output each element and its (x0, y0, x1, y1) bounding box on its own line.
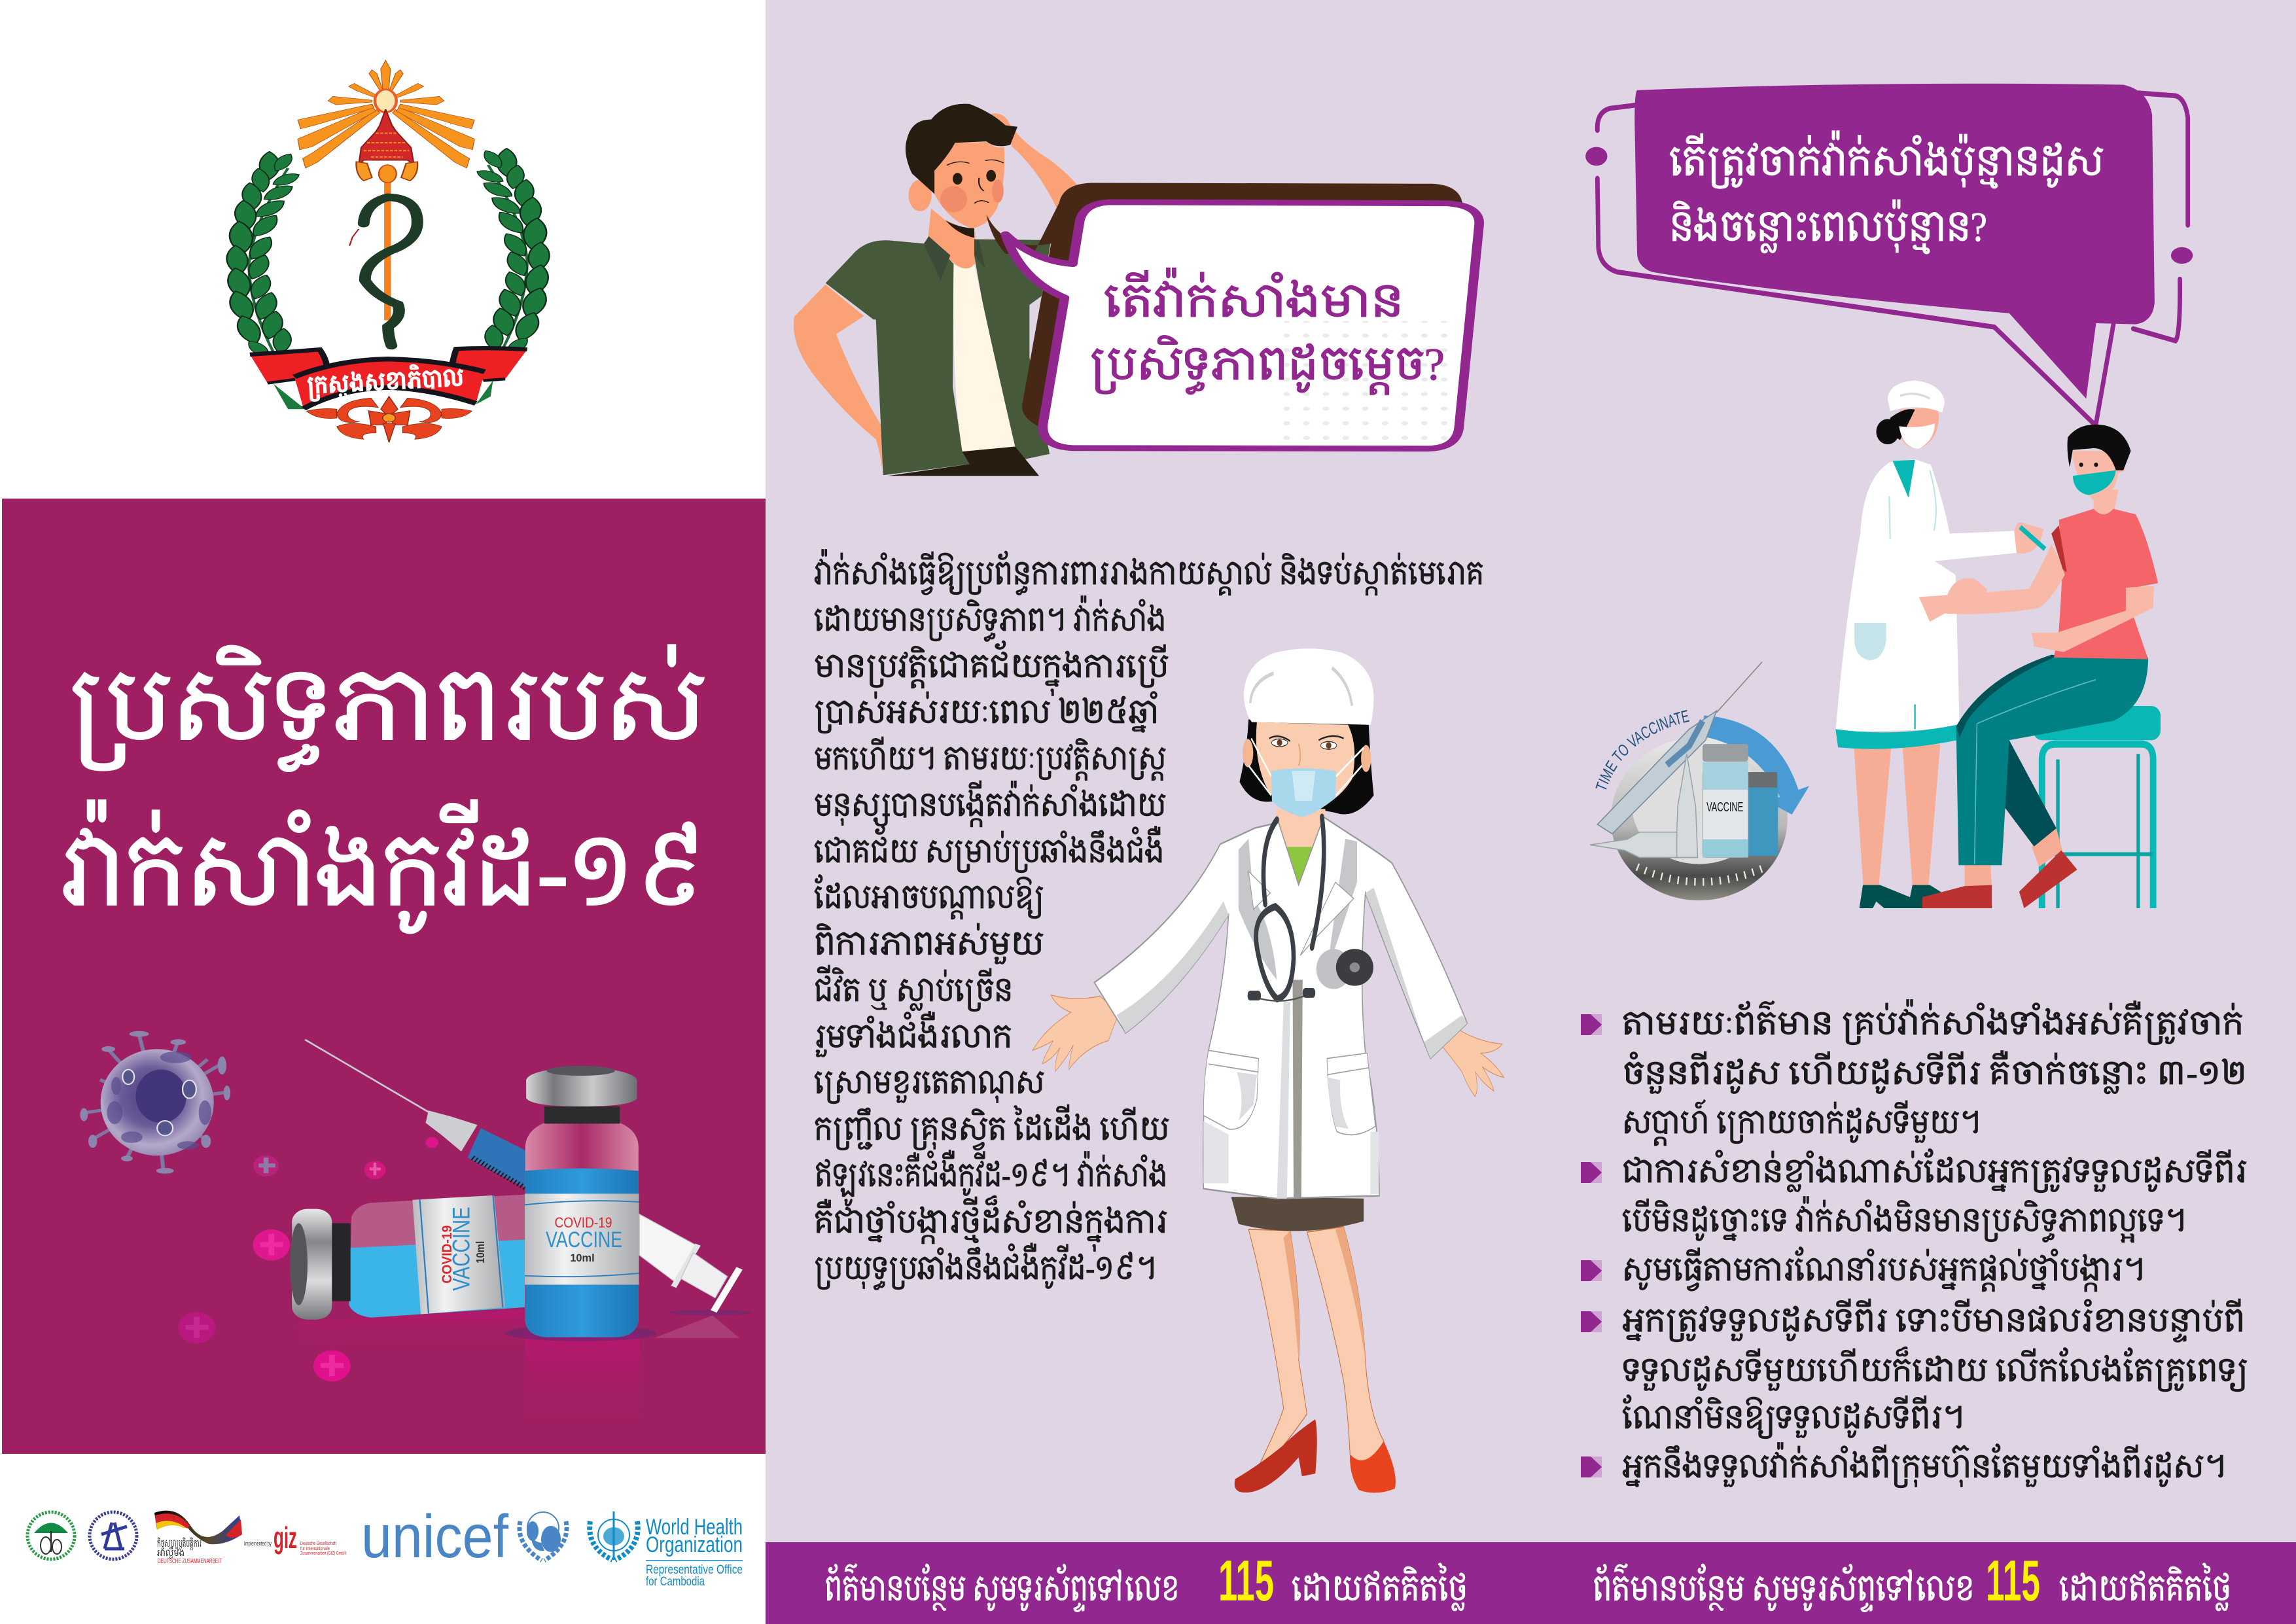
ornament (306, 397, 472, 442)
bullet 3 (1581, 1260, 1602, 1281)
icon: time to vaccinate clock: TIME TO VACCINATE (1595, 710, 1689, 789)
ribbon tails (250, 348, 527, 383)
info list: សូមធ្វើតាមការណែនាំរបស់អ្នកផ្តល់ថ្នាំបង្ការ។ (1622, 1246, 2146, 1292)
bullet 4 (1581, 1311, 1602, 1332)
hands (1033, 995, 1119, 1071)
logo: German Cambodian cooperation: កិច្ចសហប្រតិបត្តិការ (157, 1538, 202, 1550)
lying vial: VACCINE (449, 1207, 475, 1291)
neck (928, 209, 975, 268)
bubble question text (1669, 130, 2104, 254)
bubble fill (1634, 84, 2155, 398)
outline dots (1585, 147, 1607, 166)
info list (1581, 999, 2248, 1488)
body paragraph: វ៉ាក់សាំងធ្វើឱ្យប្រព័ន្ធការពាររាងកាយស្គាល់ និងទប់ស្កាត់មេរោគ (814, 549, 1484, 595)
virus (80, 1031, 230, 1174)
bullet 5 (1581, 1456, 1602, 1477)
unicef emblem (520, 1512, 567, 1561)
speech bubble: how many doses (1585, 84, 2193, 423)
raised arm (989, 113, 1078, 211)
crown (356, 109, 417, 181)
patient (1919, 425, 2158, 908)
body paragraph: ពិការភាពអស់មួយ (814, 923, 1044, 964)
footer bar: ដោយឥតគិតថ្លៃ (1292, 1563, 1468, 1612)
snake (364, 197, 417, 345)
logo: German Cambodian cooperation: អាល្លឺម៉ង់ (157, 1546, 185, 1559)
trousers (888, 447, 1039, 476)
standing vial (525, 1066, 639, 1337)
logo: partner round seal blue (90, 1512, 137, 1559)
lying vial (290, 1195, 525, 1320)
WHO emblem (590, 1511, 638, 1560)
logo: giz: Deutsche Gesellschaft (300, 1542, 336, 1546)
illustration: virus and vaccines (80, 1031, 752, 1432)
nurse (1835, 381, 2045, 908)
skirt (1231, 1197, 1364, 1231)
info list: ទទួលដូសទីមួយហើយក៏ដោយ លើកលែងតែគ្រូពេទ្យ (1622, 1347, 2248, 1392)
logo: World Health Organization: Representative Office (646, 1563, 743, 1577)
footer bar (766, 1542, 2296, 1624)
character: confused man with speech bubble (794, 104, 1479, 476)
hair (1239, 720, 1373, 815)
body paragraph: កញ្ជ្រឹល គ្រុនស្វិត ដៃដើង ហើយ (814, 1104, 1169, 1151)
info list: តាមរយៈព័ត៌មាន គ្រប់វ៉ាក់សាំងទាំងអស់គឺត្រូវចាក់ (1622, 999, 2244, 1045)
info list: សប្តាហ៍ ក្រោយចាក់ដូសទីមួយ។ (1622, 1100, 1981, 1146)
logo: giz (244, 1521, 346, 1556)
illustration: nurse vaccinating patient (1835, 381, 2161, 908)
logo: unicef: unicef (361, 1502, 508, 1570)
ears (1243, 739, 1253, 767)
ear (909, 180, 932, 211)
neck and chest (1275, 809, 1326, 885)
coat shading (1117, 888, 1467, 1059)
curved caption (1605, 721, 1691, 792)
mask (1248, 739, 1364, 796)
logo: giz: giz (274, 1521, 297, 1555)
bubble question: ប្រសិទ្ធភាពដូចម្តេច? (1089, 336, 1445, 395)
body paragraph: ដោយមានប្រសិទ្ធភាព។ វ៉ាក់សាំង (814, 595, 1166, 642)
bubble (1006, 202, 1479, 449)
left wreath (224, 152, 302, 359)
legs (1248, 1229, 1307, 1466)
bubble question text: តើត្រូវចាក់វ៉ាក់សាំងប៉ុន្មានដូស (1669, 130, 2104, 189)
standing vial: COVID-19 (554, 1215, 612, 1231)
left arm (794, 285, 899, 467)
cap (1244, 648, 1373, 725)
body paragraph: ឥឡូវនេះគឺជំងឺកូវីដ-១៩។ វ៉ាក់សាំង (814, 1150, 1167, 1207)
icon: time to vaccinate clock (1590, 662, 1809, 900)
ribbon band (294, 359, 485, 408)
body paragraph: ប្រាស់អស់រយៈពេល ២២៥ឆ្នាំ (814, 692, 1159, 733)
bubble question text: និងចន្លោះពេលប៉ុន្មាន? (1669, 199, 1987, 254)
info list: អ្នកត្រូវទទួលដូសទីពីរ ទោះបីមានផលរំខានបន្ទាប់ពី (1622, 1299, 2245, 1343)
face (934, 142, 1004, 228)
footer bar: ដោយឥតគិតថ្លៃ (2059, 1563, 2231, 1612)
hotline number left: 115 (1218, 1548, 1274, 1613)
logo: World Health Organization (590, 1511, 743, 1589)
logo: giz: Implemented by (244, 1540, 272, 1547)
coat (1094, 817, 1467, 1199)
info list: ណែនាំមិនឱ្យទទួលដូសទីពីរ។ (1622, 1394, 1965, 1439)
clock dial (1611, 737, 1788, 900)
panel: magenta title block (2, 499, 766, 1454)
vaccine bottle (1703, 771, 1748, 858)
logo: partner round seal green (27, 1512, 75, 1559)
title line 1: ប្រសិទ្ធភាពរបស់ (68, 645, 705, 771)
reflection (525, 1334, 639, 1432)
body paragraph: ប្រយុទ្ធប្រឆាំងនឹងជំងឺកូវីដ-១៩។ (814, 1243, 1157, 1290)
undershirt (953, 264, 1015, 451)
info list: ជាការសំខាន់ខ្លាំងណាស់ដែលអ្នកត្រូវទទួលដូសទីពីរ (1622, 1148, 2247, 1193)
standing vial: 10ml (570, 1252, 595, 1263)
panel: right lilac background (766, 0, 2296, 1624)
emblem: Ministry of Health (224, 60, 552, 442)
hotline number right: 115 (1986, 1548, 2040, 1613)
logo: giz: Zusammenarbeit (GIZ) GmbH (300, 1551, 346, 1556)
body paragraph: មានប្រវត្តិជោគជ័យក្នុងការប្រើ (814, 641, 1169, 696)
plus dots (178, 1137, 438, 1381)
syringe (1716, 662, 1762, 713)
bubble question (1089, 268, 1445, 395)
body paragraph: ស្រោមខួរតេតាណុស (814, 1064, 1044, 1104)
collar (924, 236, 985, 280)
title line 2: វ៉ាក់សាំងកូវីដ-១៩ (62, 800, 707, 933)
face (1256, 722, 1354, 813)
logo: German Cambodian cooperation (154, 1511, 242, 1565)
logo: World Health Organization: Organization (646, 1532, 743, 1557)
shoes (1235, 1419, 1317, 1492)
shirt (826, 236, 970, 475)
bullet 2 (1581, 1162, 1602, 1183)
lower leaves behind ribbon (274, 381, 493, 409)
title (62, 645, 707, 933)
character: female doctor (1033, 648, 1504, 1493)
right wreath (474, 149, 552, 356)
info list: បើមិនដូច្នោះទេ វ៉ាក់សាំងមិនមានប្រសិទ្ធភាពល្អទេ។ (1622, 1196, 2187, 1243)
body paragraph: ដែលអាចបណ្តាលឱ្យ (814, 874, 1044, 919)
ampoule (1676, 754, 1698, 858)
facial features (953, 173, 963, 185)
body paragraph (814, 549, 1484, 1290)
stethoscope (1256, 817, 1324, 999)
body paragraph: រួមទាំងជំងឺរលាក (814, 1011, 1012, 1057)
icon: time to vaccinate clock: VACCINE (1706, 800, 1743, 815)
halftone (1281, 321, 1457, 445)
arrow (1702, 715, 1809, 815)
info list: ចំនួនពីរដូស ហើយដូសទីពីរ គឺចាក់ចន្លោះ ៣-១២ (1622, 1050, 2247, 1094)
footer left text: ព័ត៌មានបន្ថែម សូមទូរស័ព្ទទៅលេខ (824, 1564, 1179, 1612)
bubble shadow (986, 183, 1462, 432)
stool (2033, 706, 2161, 908)
body paragraph: មនុស្សបានបង្កើតវ៉ាក់សាំងដោយ (814, 781, 1166, 827)
body paragraph: មកហើយ។ តាមរយៈប្រវត្តិសាស្ត្រ (814, 737, 1166, 781)
syringe (305, 1040, 739, 1311)
hair (906, 104, 1017, 194)
logo: giz: für Internationale (300, 1547, 330, 1551)
standing vial: VACCINE (546, 1227, 622, 1252)
bubble outline (1597, 93, 2188, 423)
bubble question: តើវ៉ាក់សាំងមាន (1104, 268, 1404, 327)
body paragraph: គឺជាថ្នាំបង្ការថ្មីដ៏សំខាន់ក្នុងការ (814, 1195, 1167, 1251)
logo: World Health Organization: World Health (646, 1515, 743, 1540)
staff (384, 175, 391, 321)
ribbon lettering: ក្រសួងសុខាភិបាល (306, 361, 465, 402)
info list: អ្នកនឹងទទួលវ៉ាក់សាំងពីក្រុមហ៊ុនតែមួយទាំងពីរដូស។ (1622, 1442, 2227, 1488)
bullet 1 (1581, 1014, 1602, 1035)
lying vial: 10ml (474, 1241, 487, 1263)
flame (375, 90, 397, 113)
lying vial: COVID-19 (440, 1226, 455, 1284)
logo: German Cambodian cooperation: DEUTSCHE ZUSAMMENARBEIT (158, 1558, 222, 1565)
blue bottle (1747, 773, 1778, 856)
sun rays (298, 60, 474, 168)
logo: World Health Organization: for Cambodia (646, 1575, 705, 1589)
pockets (1203, 1050, 1258, 1129)
body paragraph: ជោគជ័យ សម្រាប់ប្រឆាំងនឹងជំងឺ (814, 826, 1164, 873)
body paragraph: ជីវិត ឬ ស្លាប់ច្រើន (814, 965, 1013, 1012)
footer right text: ព័ត៌មានបន្ថែម សូមទូរស័ព្ទទៅលេខ (1593, 1564, 1974, 1612)
